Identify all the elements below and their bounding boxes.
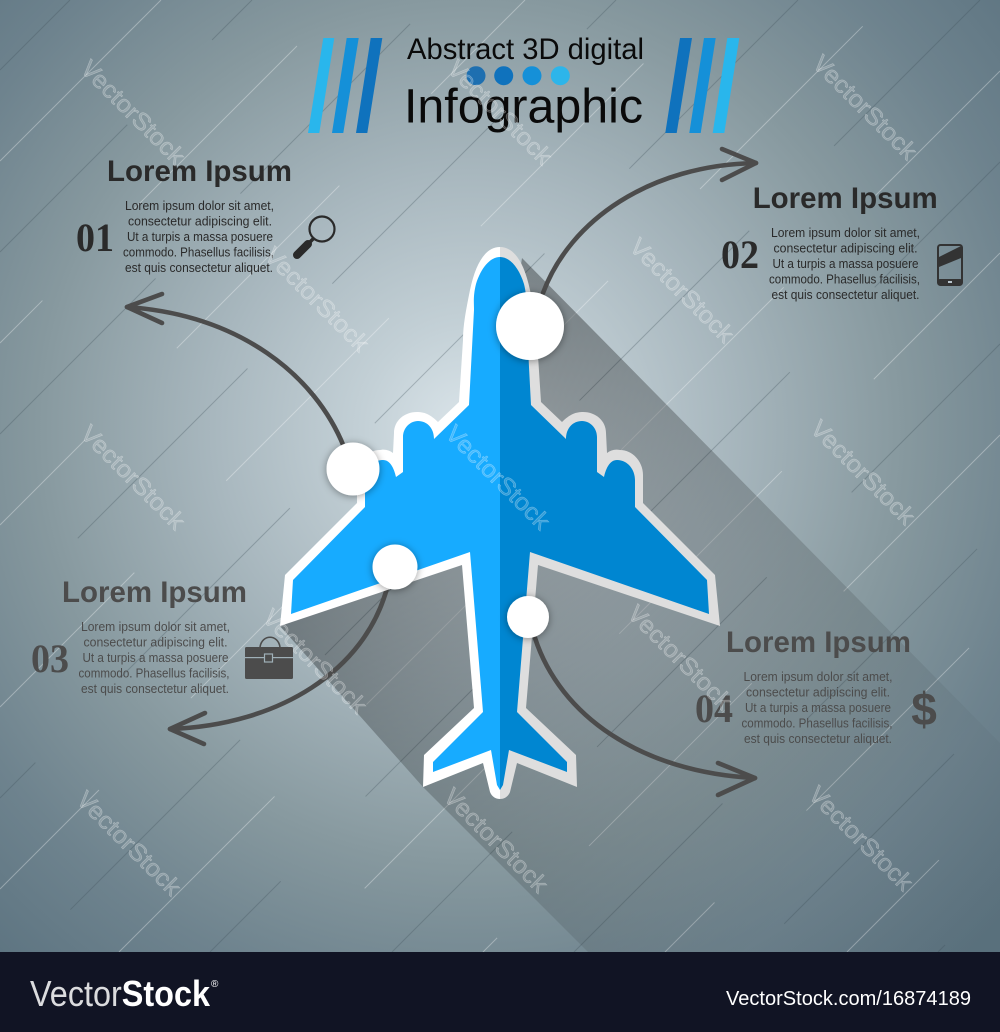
watermarks: VectorStock	[259, 242, 375, 358]
heading 03: Lorem Ipsum	[62, 576, 247, 609]
icon: dollar sign: $	[911, 683, 937, 735]
text 02: consectetur adipiscing elit.	[774, 242, 918, 256]
title line 1: Abstract 3D digital	[407, 34, 644, 66]
text 01: est quis consectetur aliquet.	[125, 261, 273, 275]
circle marker 02	[496, 292, 564, 360]
text 04: est quis consectetur aliquet.	[744, 732, 892, 746]
arrow to block 01	[127, 294, 344, 447]
circle marker 04	[507, 596, 549, 638]
long shadow of plane	[280, 258, 1000, 952]
panel: block 01	[76, 155, 334, 275]
heading 04: Lorem Ipsum	[726, 626, 911, 659]
watermarks: VectorStock	[75, 420, 191, 536]
arrow to block 03	[170, 588, 387, 744]
footer logo: VectorStock	[30, 973, 211, 1014]
text 03: consectetur adipiscing elit.	[84, 636, 228, 650]
plane right body	[500, 257, 709, 790]
text 04: Ut a turpis a massa posuere	[745, 701, 891, 715]
text 01: commodo. Phasellus facilisis,	[123, 246, 274, 260]
watermarks: VectorStock	[442, 55, 558, 171]
text 04: commodo. Phasellus facilisis,	[742, 716, 892, 730]
watermarks: VectorStock	[75, 55, 191, 171]
panel: block 04	[695, 626, 937, 746]
text 01: Lorem ipsum dolor sit amet,	[125, 199, 274, 213]
text 03: est quis consectetur aliquet.	[81, 682, 229, 696]
text 03: commodo. Phasellus facilisis,	[78, 666, 230, 680]
heading 02: Lorem Ipsum	[753, 182, 938, 215]
icon: briefcase	[245, 637, 293, 679]
text 04: consectetur adipiscing elit.	[746, 686, 890, 700]
watermarks: VectorStock	[438, 783, 554, 899]
watermarks	[71, 50, 923, 902]
footer registered mark: ®	[211, 979, 219, 990]
icon: magnifier	[297, 216, 334, 255]
plane left outline	[280, 247, 500, 799]
text 02	[769, 226, 920, 302]
number 03: 03	[31, 636, 69, 681]
heading 01: Lorem Ipsum	[107, 155, 292, 188]
circle marker 01	[326, 442, 380, 496]
text 03: Lorem ipsum dolor sit amet,	[81, 620, 230, 634]
title dots	[466, 66, 570, 85]
left stripes	[308, 38, 382, 133]
watermarks: VectorStock	[622, 600, 738, 716]
text 03: Ut a turpis a massa posuere	[82, 651, 228, 665]
watermarks: VectorStock	[624, 233, 740, 349]
watermarks: VectorStock	[805, 415, 921, 531]
text 02: Ut a turpis a massa posuere	[772, 257, 918, 271]
text 03	[78, 620, 230, 696]
text 01	[123, 199, 274, 275]
arrow to block 04	[535, 638, 755, 795]
watermarks: VectorStock	[71, 786, 187, 902]
footer bar	[0, 952, 1000, 1032]
text 04	[742, 670, 892, 746]
watermarks: VectorStock	[440, 420, 556, 536]
footer id: VectorStock.com/16874189	[726, 987, 971, 1010]
icon: smartphone	[938, 245, 962, 286]
panel: block 03	[31, 576, 293, 696]
title line 2: Infographic	[404, 80, 643, 134]
panel: block 02	[721, 182, 962, 302]
arrow to block 02	[543, 149, 756, 293]
right stripes	[665, 38, 739, 133]
number 02: 02	[721, 232, 759, 277]
text 01: Ut a turpis a massa posuere	[127, 230, 273, 244]
plane right outline	[500, 247, 720, 799]
text 04: Lorem ipsum dolor sit amet,	[744, 670, 892, 684]
watermarks: VectorStock	[807, 50, 923, 166]
watermarks: VectorStock	[803, 781, 919, 897]
number 01: 01	[76, 215, 114, 260]
watermarks: VectorStock	[257, 604, 373, 720]
text 01: consectetur adipiscing elit.	[128, 214, 272, 228]
number 04: 04	[695, 686, 733, 731]
text 02: Lorem ipsum dolor sit amet,	[771, 226, 920, 240]
text 02: commodo. Phasellus facilisis,	[769, 272, 920, 286]
plane left body	[291, 257, 500, 790]
title group	[308, 34, 739, 134]
airplane	[280, 247, 720, 799]
circle marker 03	[372, 544, 418, 590]
text 02: est quis consectetur aliquet.	[772, 288, 920, 302]
